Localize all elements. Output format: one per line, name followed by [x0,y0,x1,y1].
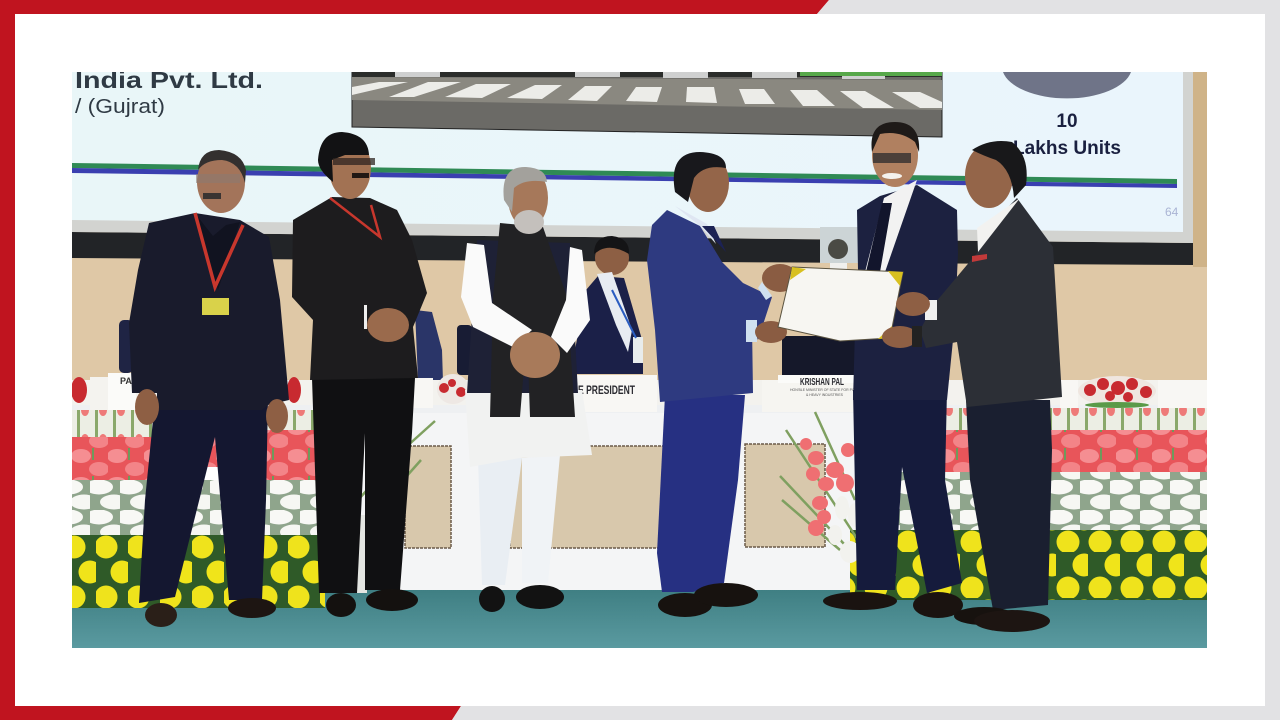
company name: India Pvt. Ltd. [75,67,263,93]
certificate [778,267,903,341]
flower bed left [72,410,367,608]
plate: Krishan Pal [778,375,854,396]
watch [912,326,922,347]
shoes [326,593,356,617]
head [508,168,548,228]
shirt collar [675,206,716,244]
road photo [352,72,942,137]
shoes [145,603,177,627]
trophy [820,227,858,273]
hands [510,332,560,378]
pants [478,458,522,585]
shoes [954,607,1014,625]
table panels [405,444,825,548]
shirt [977,198,1020,252]
plate: vice president [575,375,657,412]
person 3 [461,167,592,612]
head table [72,380,1207,590]
trousers [966,400,1052,610]
name plates [90,373,1207,412]
jacket [129,213,289,410]
pocket square [972,254,987,262]
shoes [658,593,712,617]
moustache [203,193,221,199]
stage wall [72,72,1207,392]
plate: Krishan Pal: HON'BLE MINISTER OF STATE FOR POWER [790,388,863,392]
shoes [823,592,897,610]
person 2 [292,132,427,617]
tie [702,226,726,252]
person 4: presenter [647,152,798,617]
photo: award ceremony [71,67,1207,648]
flower bed right [850,408,1207,600]
vest [467,240,578,393]
moustache [352,173,369,178]
glasses [873,153,911,163]
table bouquets [71,374,1156,408]
carpet [72,590,1207,648]
glasses [333,158,375,165]
plate: Krishan Pal: & HEAVY INDUSTRIES [806,393,844,397]
shirt [865,180,917,272]
smile [882,173,902,179]
cuff [925,300,937,320]
sleeves [461,243,532,347]
plate: left [90,373,136,410]
slide rule [72,163,1177,188]
grey circle chart [1003,72,1131,98]
lanyard [330,198,380,237]
tie [866,203,892,272]
person 1 [129,150,289,627]
gladioli spray [780,412,862,563]
hands [762,264,798,292]
head [330,154,371,199]
spray left [358,421,435,500]
jacket [920,198,1062,407]
head [965,144,1013,208]
hands [135,389,159,425]
hands [367,308,409,342]
kurta lower [465,390,592,467]
projection screen [72,67,1193,265]
scarf [490,223,575,417]
lanyard [195,213,243,287]
person 6: recipient [882,141,1062,632]
plate: vice president: E PRESIDENT [578,383,635,397]
value: 10 [1056,111,1078,132]
plate: Krishan Pal: KRISHAN PAL [800,377,844,388]
person 5: recipient [823,122,963,618]
shoes [479,586,505,612]
hands [896,292,930,316]
jacket [647,210,772,402]
glasses [196,174,240,183]
head [197,160,245,213]
head [872,123,918,187]
jacket shading [198,218,240,289]
head [687,154,729,212]
plate: left: PA [120,376,132,386]
unit: Lakhs Units [1013,138,1121,159]
location: / (Gujrat) [75,96,165,118]
id badge [202,298,229,315]
shirt cuffs [758,282,772,300]
slide number: 64 [1165,205,1179,219]
trousers [139,400,268,603]
background seated figures [119,310,857,382]
trousers [657,395,745,592]
seated official [575,236,643,374]
